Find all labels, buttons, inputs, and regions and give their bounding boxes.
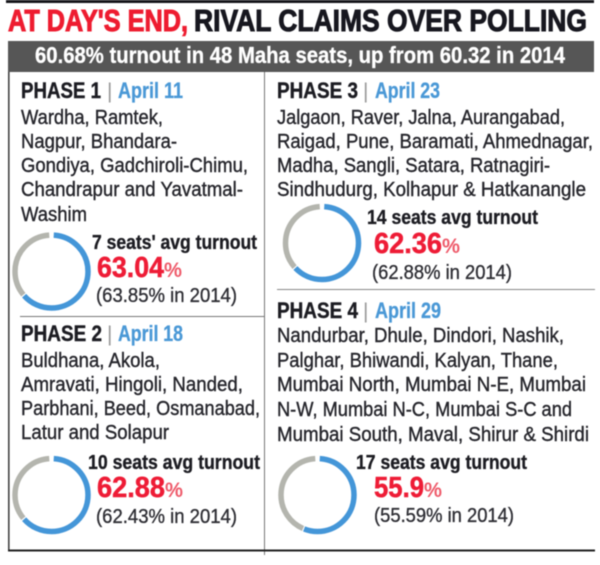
- text: phase 2 constituencies: Parbhani, Beed, Osmanabad,: [21, 397, 260, 420]
- heading: phase 4: April 29: [375, 298, 441, 323]
- text: phase 1 constituencies: [21, 106, 248, 226]
- text: phase 3 constituencies: [277, 106, 593, 201]
- heading: phase 4: [277, 298, 441, 323]
- panel: phase 3: [277, 78, 593, 284]
- stats: phase 3 turnout: 14 seats avg turnout: [367, 207, 538, 229]
- stats: phase 2 turnout: 62.88: [97, 472, 165, 504]
- text: phase 1 constituencies: Chandrapur and Yavatmal-: [21, 178, 243, 201]
- text: phase 1 constituencies: Nagpur, Bhandara-: [21, 130, 177, 153]
- text: phase 4 constituencies: Nandurbar, Dhule, Dindori, Nashik,: [277, 324, 564, 347]
- text: phase 4 constituencies: [277, 324, 589, 446]
- heading: phase 1: April 11: [118, 78, 183, 103]
- text: phase 1 constituencies: Gondiya, Gadchiroli-Chimu,: [21, 154, 248, 177]
- panel: phase 4: [277, 298, 589, 532]
- donut chart: phase 2 turnout: [15, 458, 88, 532]
- stats: phase 3 turnout: (62.88% in 2014): [372, 261, 512, 284]
- heading: phase 3: PHASE 3: [277, 78, 358, 103]
- text: phase 2 constituencies: Amravati, Hingoli, Nanded,: [21, 373, 243, 396]
- heading: phase 3: [277, 78, 440, 103]
- text: phase 2 constituencies: Buldhana, Akola,: [21, 349, 160, 372]
- stats: phase 4 turnout: %: [424, 479, 442, 502]
- stats: phase 3 turnout: [367, 207, 538, 284]
- heading: phase 1: PHASE 1: [21, 78, 101, 103]
- stats: phase 4 turnout: 17 seats avg turnout: [356, 452, 527, 474]
- stats: phase 1 turnout: [92, 232, 257, 307]
- text: phase 1 constituencies: Washim: [21, 203, 87, 226]
- stats: phase 1 turnout: (63.85% in 2014): [96, 284, 237, 307]
- stats: phase 4 turnout: [356, 452, 527, 527]
- heading: phase 4: |: [363, 300, 368, 323]
- heading: phase 2: PHASE 2: [21, 321, 102, 346]
- text: phase 3 constituencies: Madha, Sangli, Satara, Ratnagiri-: [277, 154, 550, 177]
- heading: phase 3: April 23: [375, 78, 440, 103]
- text: phase 1 constituencies: Wardha, Ramtek,: [21, 106, 163, 129]
- stats: phase 1 turnout: %: [164, 259, 182, 282]
- heading: phase 1: [21, 78, 183, 103]
- title: AT DAY'S END,: [8, 3, 188, 38]
- stats: phase 1 turnout: 63.04: [97, 252, 164, 284]
- donut chart: phase 3 turnout: [286, 206, 358, 280]
- panel: phase 1: [15, 78, 257, 308]
- text: phase 3 constituencies: Jalgaon, Raver, Jalna, Aurangabad,: [277, 106, 565, 129]
- stats: phase 3 turnout: %: [442, 235, 460, 258]
- title: [8, 3, 587, 38]
- panel: phase 2: [15, 321, 260, 532]
- heading: phase 3: |: [363, 80, 368, 103]
- text: phase 4 constituencies: Palghar, Bhiwandi, Kalyan, Thane,: [277, 349, 558, 372]
- stats: phase 4 turnout: 55.9: [374, 472, 424, 504]
- stats: phase 3 turnout: 62.36: [374, 228, 442, 260]
- heading: phase 1: |: [107, 80, 112, 103]
- heading: phase 4: PHASE 4: [277, 298, 359, 323]
- stats: phase 4 turnout: (55.59% in 2014): [374, 504, 514, 527]
- text: phase 2 constituencies: Latur and Solapur: [21, 421, 169, 444]
- stats: phase 2 turnout: [88, 452, 260, 528]
- heading: phase 2: |: [107, 323, 112, 346]
- stats: phase 2 turnout: (62.43% in 2014): [96, 505, 237, 528]
- stats: phase 1 turnout: 7 seats' avg turnout: [92, 232, 257, 254]
- heading: phase 2: [21, 321, 183, 346]
- text: phase 2 constituencies: [21, 349, 260, 444]
- text: phase 4 constituencies: N-W, Mumbai N-C, Mumbai S-C and: [277, 398, 572, 421]
- stats: phase 2 turnout: %: [165, 479, 183, 502]
- donut chart: phase 1 turnout: [15, 235, 88, 308]
- donut chart: phase 4 turnout: [281, 458, 354, 532]
- heading: phase 2: April 18: [118, 321, 183, 346]
- stats: phase 2 turnout: 10 seats avg turnout: [88, 452, 260, 474]
